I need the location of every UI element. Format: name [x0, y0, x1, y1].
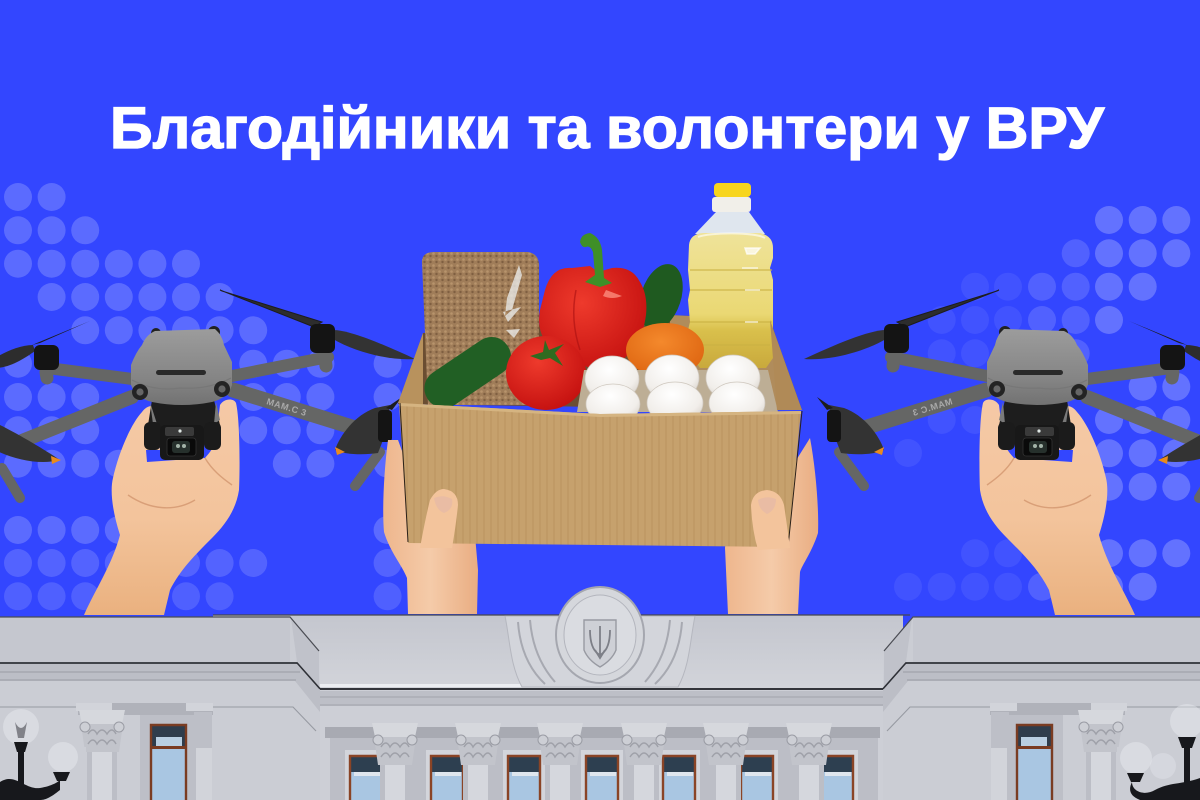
red tomato — [506, 336, 586, 410]
orange tomato — [626, 323, 704, 377]
thumbs over box — [420, 489, 790, 550]
cornice mouldings — [300, 684, 900, 706]
hands holding box: back parts — [383, 438, 818, 614]
cucumber behind pepper — [631, 258, 691, 336]
left cucumber — [417, 330, 518, 416]
right street lamp — [1120, 704, 1200, 800]
red bell pepper — [539, 233, 646, 372]
colonnade soffit — [325, 727, 880, 738]
box back and inner walls — [398, 315, 802, 410]
eggs — [585, 355, 765, 424]
egg tray — [577, 370, 778, 412]
food box contents — [398, 183, 802, 547]
relief drapery around emblem — [505, 616, 695, 687]
left street lamp — [0, 709, 78, 800]
attic storey — [213, 615, 903, 688]
relief folds — [518, 620, 682, 684]
right drone held by hand — [804, 290, 1200, 615]
title: Благодійники та волонтери у ВРУ — [110, 96, 1105, 161]
columns — [372, 723, 832, 800]
colonnade back wall — [330, 738, 878, 800]
right wing of building — [883, 617, 1200, 800]
state emblem medallion — [556, 587, 644, 683]
parapet line — [213, 614, 910, 616]
entablature band — [300, 688, 900, 800]
box side flaps — [398, 320, 802, 410]
dot pattern: right — [894, 206, 1200, 601]
box front — [399, 403, 802, 547]
parliament building — [0, 587, 1200, 800]
buckwheat package — [422, 252, 539, 405]
dot pattern: left — [4, 183, 402, 610]
windows between columns — [345, 750, 858, 800]
left wing of building — [0, 617, 320, 800]
bottle of oil — [688, 183, 773, 368]
left drone held by hand — [0, 290, 415, 615]
